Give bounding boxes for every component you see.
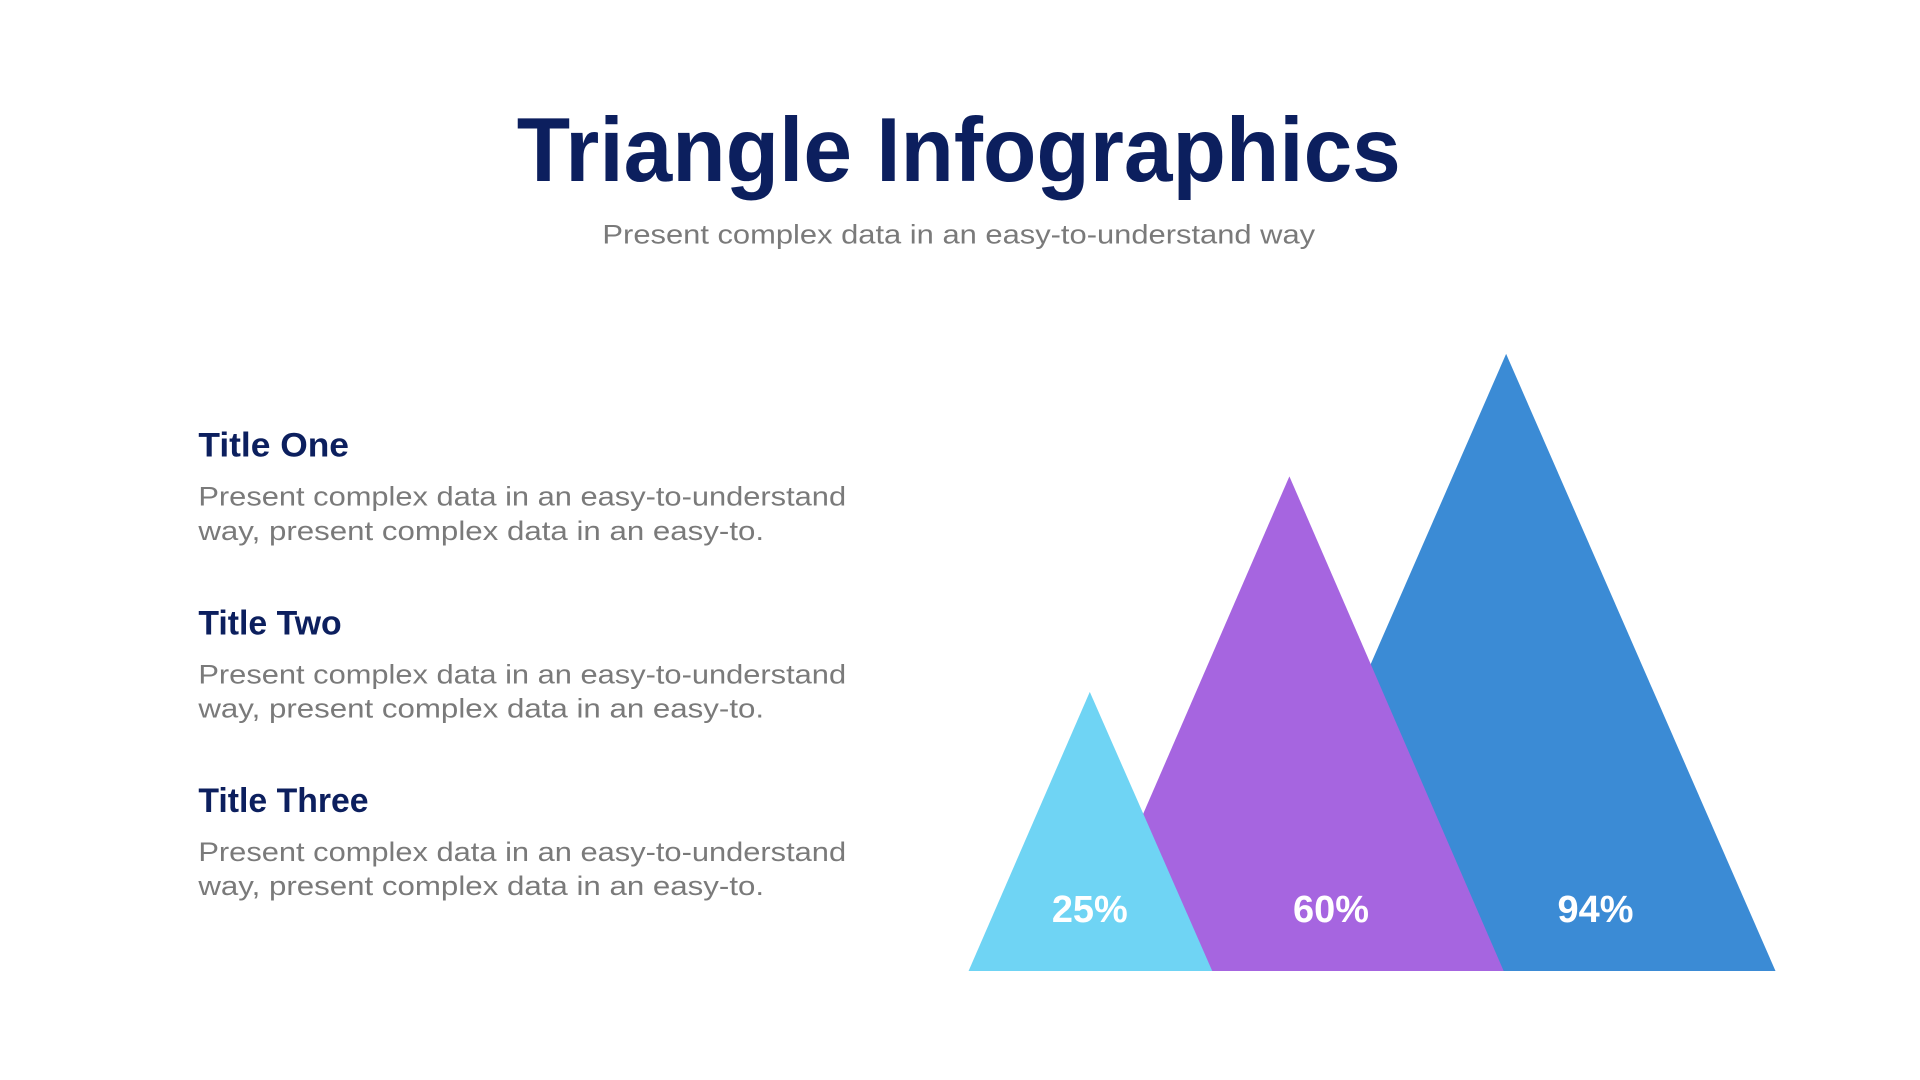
text block: title one: way, present complex data in an easy-to.: [197, 516, 764, 546]
label: 60%: 60%: [1293, 889, 1369, 931]
text block: title two: [197, 604, 846, 724]
text block: title three: Present complex data in an easy-to-understand: [198, 837, 846, 867]
text block: title two: Present complex data in an easy-to-understand: [198, 659, 846, 689]
text block: title three: Title Three: [198, 782, 369, 820]
triangle: 60%: [1075, 476, 1504, 971]
text block: title three: [197, 782, 846, 901]
title: Triangle Infographics: [517, 100, 1401, 201]
text block: title one: [197, 427, 846, 546]
text block: title three: way, present complex data in an easy-to.: [197, 871, 764, 901]
text block: title two: way, present complex data in an easy-to.: [197, 694, 764, 724]
triangle: 25%: [969, 692, 1212, 971]
triangle chart: [969, 354, 1776, 971]
text block: title one: Present complex data in an easy-to-understand: [198, 482, 846, 512]
text block: title one: Title One: [198, 427, 349, 465]
triangle: 94%: [1237, 354, 1776, 971]
text block: title two: Title Two: [198, 604, 342, 642]
subtitle: Present complex data in an easy-to-understand way: [602, 220, 1316, 250]
label: 94%: 94%: [1558, 889, 1633, 931]
label: 25%: 25%: [1052, 889, 1128, 931]
